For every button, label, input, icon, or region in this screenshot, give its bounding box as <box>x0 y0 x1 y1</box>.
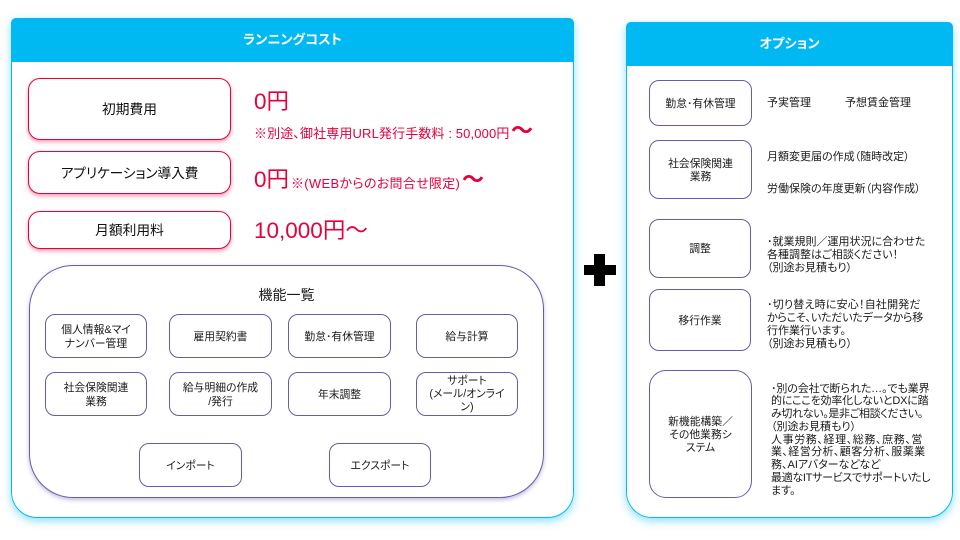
value: initial cost: 0円 <box>254 89 289 114</box>
option text: new feature build: 最適なITサービスでサポートいたし <box>771 472 930 484</box>
option label: adjustment: 調整 <box>689 243 711 255</box>
panel: options <box>626 22 953 518</box>
panel: running cost <box>11 18 574 518</box>
feature: payslip: 給与明細の作成 <box>183 382 258 394</box>
heading: feature list: 機能一覧 <box>258 287 314 303</box>
feature: support <box>416 372 518 416</box>
option text: labor insurance: 労働保険の年度更新（内容作成） <box>767 183 921 195</box>
feature: import: インポート <box>166 460 215 472</box>
feature: attendance: 勤怠･有休管理 <box>304 331 375 343</box>
label: application fee <box>28 151 231 194</box>
value: application fee: 0円 <box>254 167 289 192</box>
heading: options <box>626 22 953 66</box>
option text: migration: からこそ、いただいたデータから移 <box>767 312 923 324</box>
note: application fee: ※(WEBからのお問合せ限定) <box>291 176 460 191</box>
feature: year-end adjustment <box>288 372 391 416</box>
panel: feature list <box>29 265 544 498</box>
option text: new feature build: 人事労務、経理、総務、庶務、営 <box>771 434 923 446</box>
label: initial cost: 初期費用 <box>102 102 157 117</box>
option label: migration: 移行作業 <box>678 315 722 327</box>
feature: payroll <box>416 314 518 358</box>
label: monthly fee <box>28 211 231 249</box>
feature: support: (メール/オンライ <box>429 388 505 400</box>
feature: support: ン) <box>460 401 474 413</box>
option label: social insurance: 業務 <box>690 171 711 183</box>
option text: new feature build: 務、AIアバターなどなど <box>771 459 880 471</box>
heading: running cost <box>11 18 574 62</box>
option label: attendance <box>649 80 752 126</box>
option text: migration: 行作業行います。 <box>767 324 846 336</box>
feature: year-end adjustment: 年末調整 <box>318 389 361 401</box>
option text: new feature build: ます。 <box>771 485 796 497</box>
feature: employment contract <box>169 314 272 358</box>
option text: adjustment <box>767 236 925 274</box>
label: monthly fee: 月額利用料 <box>95 223 164 238</box>
feature: employment contract: 雇用契約書 <box>194 331 247 343</box>
option text: migration: （別途お見積もり） <box>767 338 852 350</box>
option label: new feature build: その他業務シ <box>669 429 732 441</box>
option text: budget management: 予実管理 <box>767 97 811 109</box>
label: initial cost <box>28 78 231 140</box>
option label: migration <box>649 289 751 351</box>
feature: personal info: 個人情報&マイ <box>61 324 131 336</box>
feature: social insurance: 社会保険関連 <box>64 382 128 394</box>
option text: adjustment: 各種調整はご相談ください！ <box>767 249 898 261</box>
option label: adjustment <box>649 219 751 278</box>
tilde: initial cost note: 〜 <box>511 118 533 143</box>
option label: new feature build: 新機能構築／ <box>668 416 733 428</box>
feature: social insurance: 業務 <box>85 396 107 408</box>
feature: export: エクスポート <box>351 460 409 472</box>
feature: personal info <box>45 314 147 358</box>
heading: running cost: ランニングコスト <box>243 32 342 47</box>
option text: new feature build: （別途お見積もり） <box>771 421 856 433</box>
option text: adjustment: ･就業規則／運用状況に合わせた <box>767 236 925 248</box>
option text: migration <box>767 298 923 350</box>
heading: options: オプション <box>759 36 820 51</box>
option text: wage forecast: 予想賃金管理 <box>845 97 911 109</box>
feature: export <box>329 443 431 487</box>
icon: plus <box>584 254 616 286</box>
value: monthly fee: 10,000円～ <box>254 218 368 243</box>
feature: personal info: ナンバー管理 <box>65 338 127 350</box>
tilde: application fee note: 〜 <box>462 167 484 192</box>
option text: adjustment: （別途お見積もり） <box>767 262 852 274</box>
note: initial cost: ※別途、御社専用URL発行手数料 : 50,000円 <box>254 126 509 141</box>
label: application fee: アプリケーション導入費 <box>61 166 198 180</box>
option text: new feature build: 的にここを効率化しないとDXに踏 <box>771 395 928 407</box>
option text: new feature build: 業、経営分析、顧客分析、服薬業 <box>771 446 926 458</box>
feature: payslip <box>169 372 272 416</box>
feature: payroll: 給与計算 <box>445 331 489 343</box>
option text: new feature build: ･別の会社で断られた…。でも業界 <box>771 382 929 394</box>
option label: social insurance <box>649 140 752 199</box>
feature: attendance <box>288 314 391 358</box>
feature: support: サポート <box>447 375 487 387</box>
option text: migration: ･切り替え時に安心！自社開発だ <box>767 298 921 310</box>
option text: new feature build: み切れない。是非ご相談ください。 <box>771 408 923 420</box>
feature: social insurance <box>45 372 147 416</box>
feature: payslip: /発行 <box>208 396 233 408</box>
option label: social insurance: 社会保険関連 <box>668 158 733 170</box>
option text: new feature build <box>771 382 930 497</box>
option label: attendance: 勤怠･有休管理 <box>665 98 736 110</box>
feature: import <box>139 443 242 487</box>
option text: monthly change notice: 月額変更届の作成（随時改定） <box>767 151 910 163</box>
option label: new feature build: ステム <box>686 442 715 454</box>
option label: new feature build <box>649 370 752 498</box>
